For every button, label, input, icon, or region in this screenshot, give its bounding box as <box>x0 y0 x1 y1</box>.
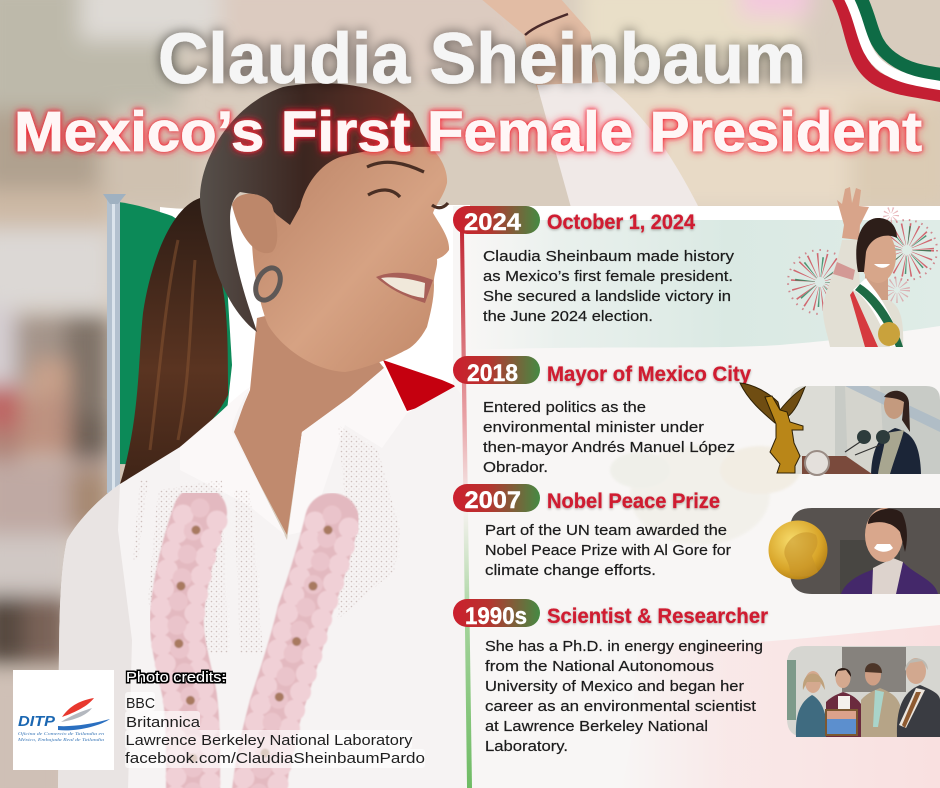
body text <box>485 522 731 579</box>
person 2 <box>826 668 861 737</box>
year pill 1990s <box>453 599 540 630</box>
tricolor ribbon corner <box>838 0 940 96</box>
icon: Nobel medal <box>768 520 828 580</box>
garland base <box>177 513 332 788</box>
body text: Laboratory. <box>485 738 568 755</box>
fireworks <box>788 210 937 314</box>
body text: environmental minister under <box>483 419 704 436</box>
heading: Nobel Peace Prize: Nobel Peace Prize <box>547 490 720 513</box>
eyebrow and eye <box>367 162 448 208</box>
year pill 1990s: 1990s <box>465 603 527 630</box>
flower garland <box>160 508 349 788</box>
photo: press conference <box>790 386 940 475</box>
Mexican flag and pole <box>103 194 470 493</box>
body text: then-mayor Andrés Manuel López <box>483 439 735 456</box>
year pill 2024 <box>453 206 540 236</box>
flower shadows <box>177 530 328 788</box>
year pill 2007 <box>453 484 540 514</box>
raised arm and sleeve <box>480 0 700 240</box>
credits list: Britannica <box>126 714 201 731</box>
photo credits <box>125 669 425 768</box>
credits highlight boxes <box>125 692 425 768</box>
body text: Claudia Sheinbaum made history <box>483 248 735 265</box>
year pill 2024: 2024 <box>464 209 521 236</box>
earring <box>251 264 285 304</box>
framed painting <box>825 709 858 736</box>
microphones and podium <box>802 430 890 475</box>
credits list: facebook.com/ClaudiaSheinbaumPardo <box>125 750 425 767</box>
body text: as Mexico’s first female president. <box>483 268 733 285</box>
heading: Mayor of Mexico City: Mayor of Mexico City <box>547 363 751 386</box>
body text: University of Mexico and began her <box>485 678 744 695</box>
smile <box>376 273 433 303</box>
credits heading: Photo credits: <box>126 669 226 686</box>
logo swooshes <box>58 698 110 730</box>
speaker <box>871 391 921 474</box>
credits list: BBC <box>126 695 155 712</box>
entry: 2007 <box>453 484 940 594</box>
icon: Angel of Independence statue <box>740 383 805 473</box>
body text: career as an environmental scientist <box>485 698 757 715</box>
petals: centre track <box>177 508 332 788</box>
body text: climate change efforts. <box>485 562 656 579</box>
flagpole <box>103 194 126 493</box>
flag: red field <box>383 360 470 411</box>
body text: the June 2024 election. <box>483 308 653 325</box>
flag: white field <box>160 205 470 480</box>
year pill 2018 <box>453 356 540 387</box>
heading: October 1, 2024: October 1, 2024 <box>547 211 695 234</box>
body text: Entered politics as the <box>483 399 646 416</box>
DITP logo <box>13 670 114 770</box>
body text: She has a Ph.D. in energy engineering <box>485 638 763 655</box>
heading: Scientist & Researcher: Scientist & Researcher <box>547 605 768 628</box>
year pill 2007: 2007 <box>464 487 521 514</box>
body text <box>483 248 735 325</box>
timeline panel background <box>453 206 940 788</box>
faint coat of arms <box>610 445 800 545</box>
body text <box>483 399 735 476</box>
person 3 <box>861 663 900 737</box>
year pill 2018: 2018 <box>467 360 518 387</box>
body text: She secured a landslide victory in <box>483 288 731 305</box>
photo: smiling portrait <box>790 508 940 594</box>
credits list: Lawrence Berkeley National Laboratory <box>126 732 413 749</box>
body text: at Lawrence Berkeley National <box>485 718 708 735</box>
title: Claudia Sheinbaum: Claudia Sheinbaum <box>158 20 806 99</box>
credits list <box>125 695 425 767</box>
body text: Obrador. <box>483 459 548 476</box>
neck <box>232 300 384 535</box>
shirt collar <box>180 368 407 535</box>
flag: green field <box>118 202 232 465</box>
logo tagline: Oficina de Comercio de Tailandia en <box>18 731 105 736</box>
entry: 1990s <box>453 599 940 755</box>
body text: Nobel Peace Prize with Al Gore for <box>485 542 731 559</box>
photo: group of researchers <box>787 646 940 737</box>
ear <box>232 194 277 253</box>
logo tagline: México, Embajada Real de Tailandia <box>17 737 105 743</box>
subtitle: Mexico's First Female President: Mexico’s First Female President <box>14 100 922 164</box>
ponytail <box>120 198 228 484</box>
logo tagline <box>17 731 105 743</box>
person 4 <box>897 658 940 737</box>
body text: Part of the UN team awarded the <box>485 522 727 539</box>
timeline line <box>460 232 472 788</box>
hair <box>200 83 430 332</box>
petals: outer tracks <box>160 515 349 788</box>
body text: from the National Autonomous <box>485 658 714 675</box>
face <box>252 146 449 372</box>
logo wordmark: DITP <box>18 713 56 730</box>
white shirt <box>58 368 470 788</box>
portrait of Claudia Sheinbaum <box>58 83 470 788</box>
body text <box>485 638 763 755</box>
person 1 <box>796 671 827 737</box>
lace embroidery <box>133 425 400 653</box>
entry: 2018 <box>453 356 940 476</box>
entry: 2024 <box>453 187 937 347</box>
photo: waving president <box>823 187 903 347</box>
